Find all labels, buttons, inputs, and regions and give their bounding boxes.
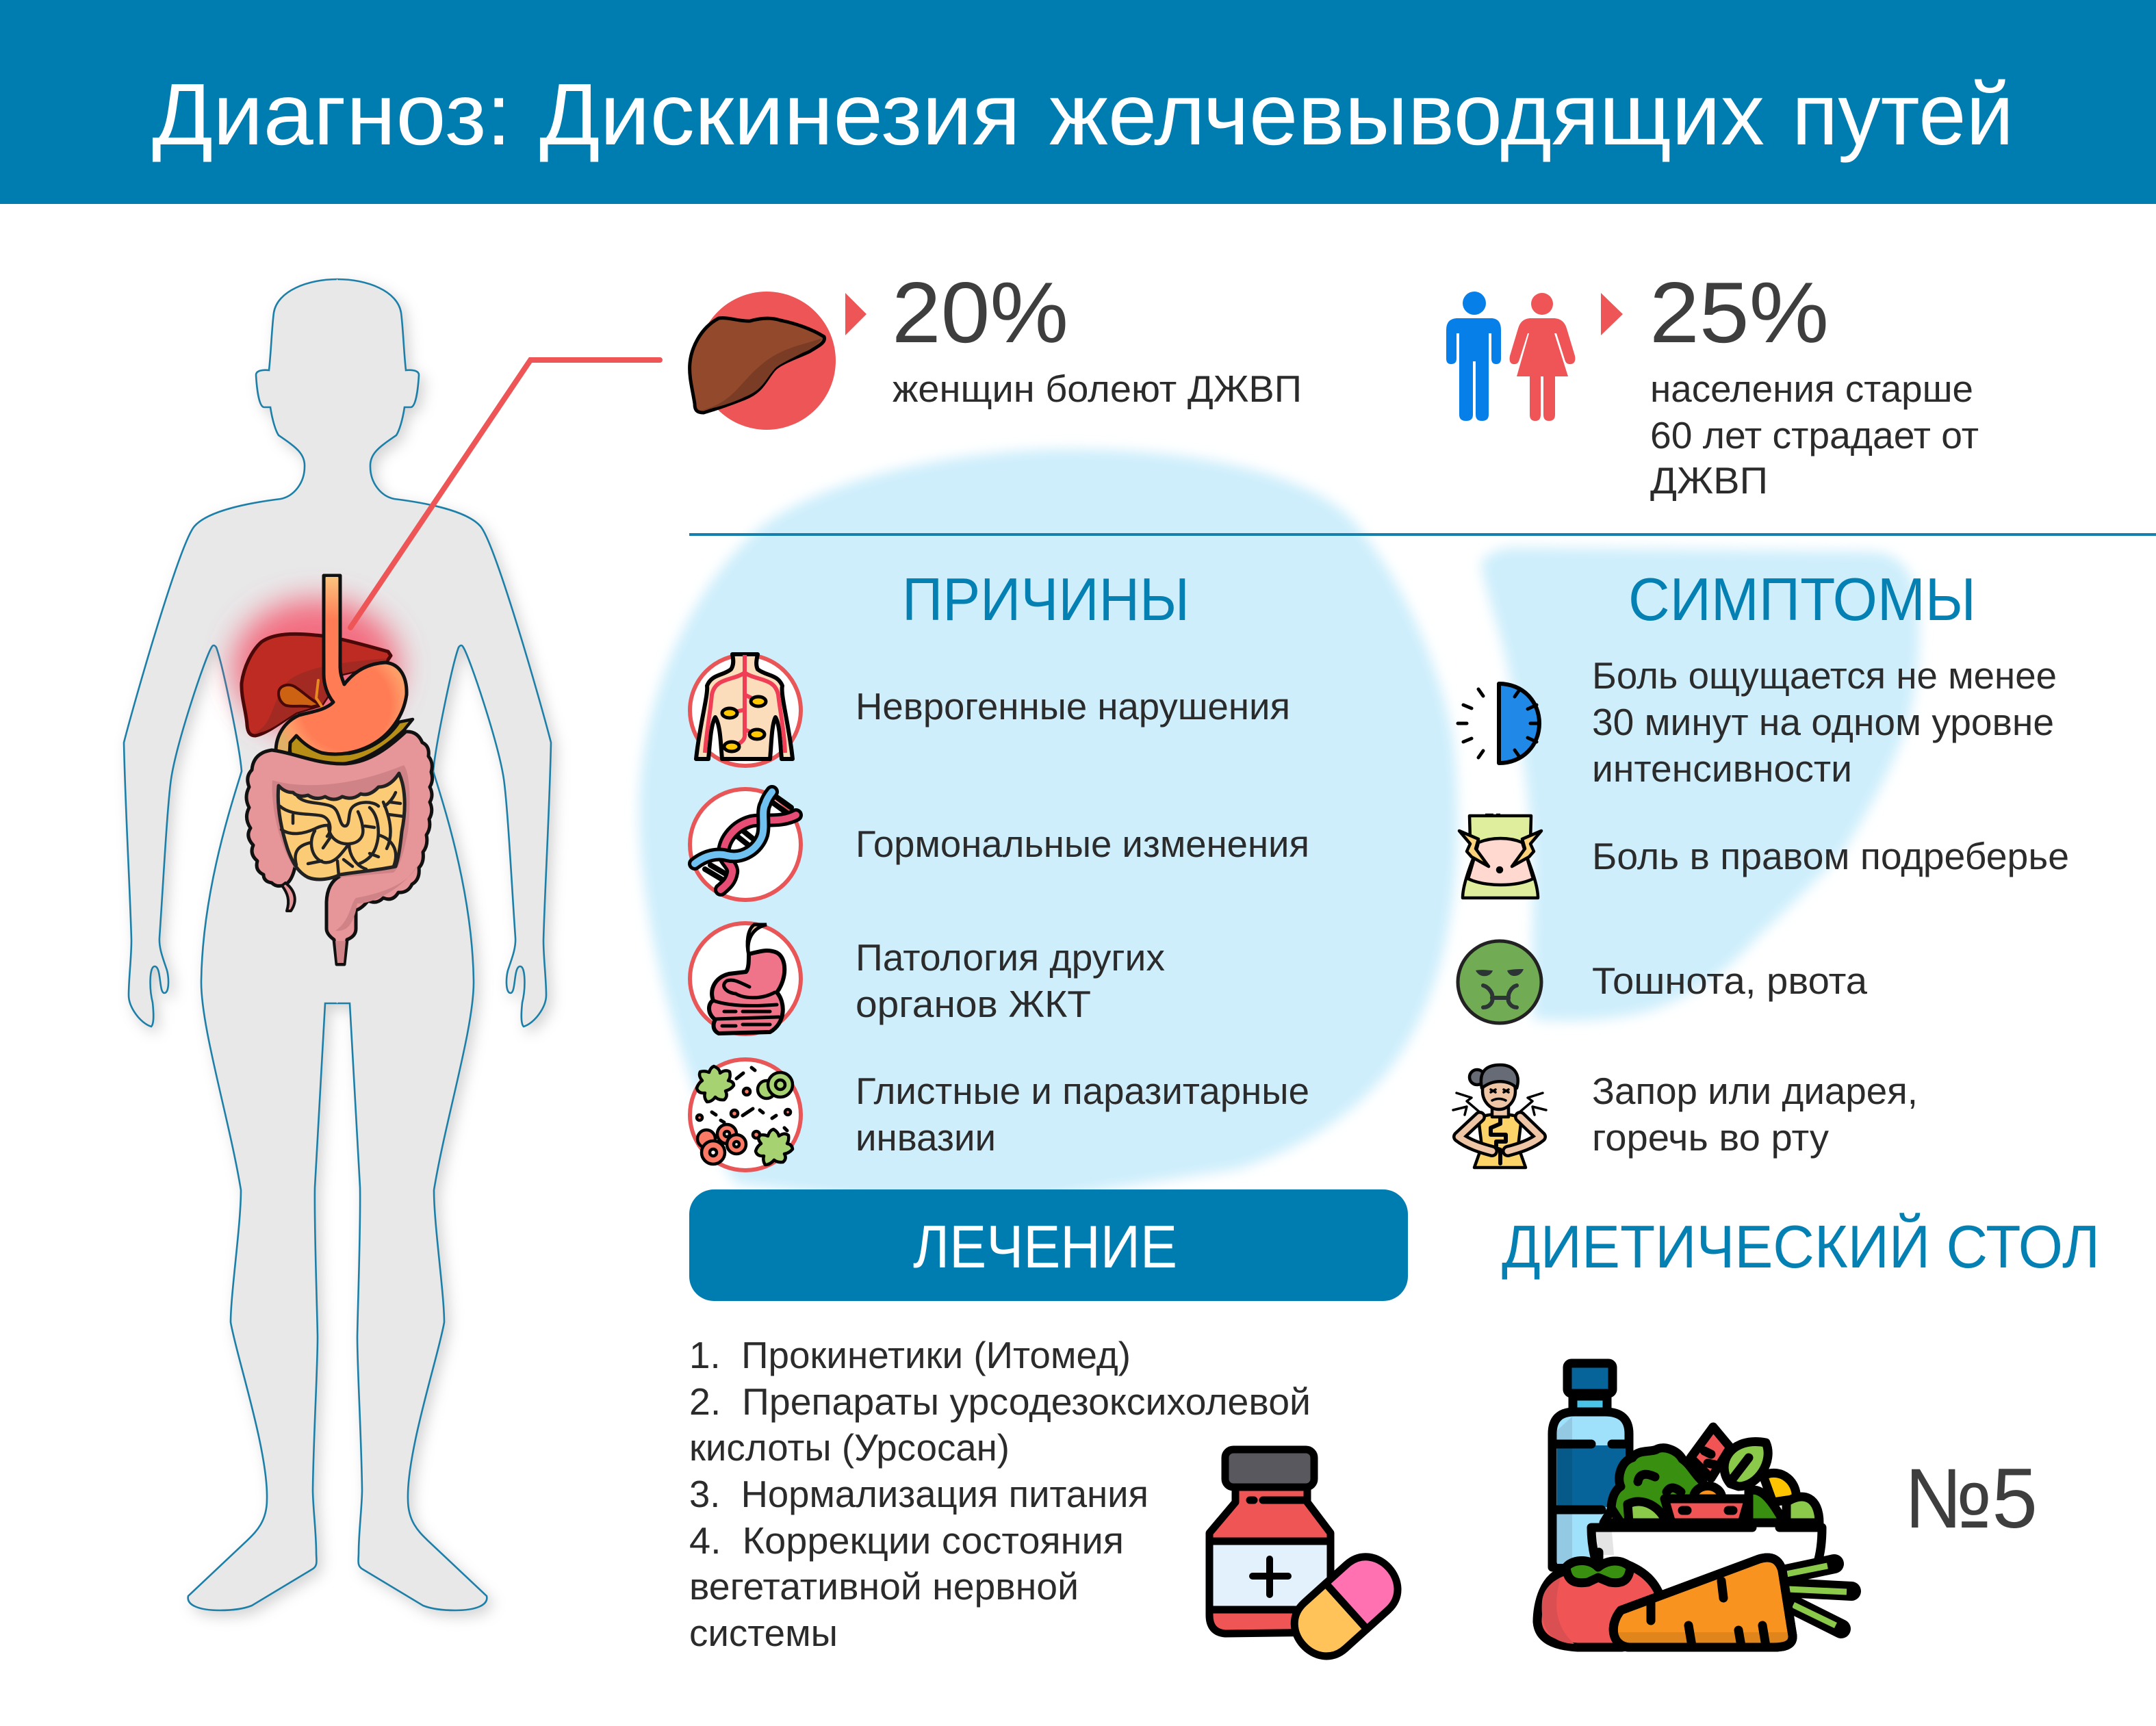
icon: food [1537,1363,1851,1647]
icon: nerves torso [690,654,801,766]
description: женщин болеют ДЖВП [893,368,1302,410]
pointer arrow [845,293,867,335]
text: constipation: Запор или диарея, [1592,1070,1918,1112]
treatment list: системы [689,1612,838,1654]
liver organ [242,634,391,736]
value: 20% [892,264,1068,361]
pointer arrow [1601,293,1623,335]
salad [1604,1427,1819,1523]
pancreas [290,719,413,764]
treatment list: кислоты (Урсосан) [689,1426,1010,1469]
inner shading [272,765,409,877]
heading: symptoms: СИМПТОМЫ [1628,565,1976,633]
heading: diet table: ДИЕТИЧЕСКИЙ СТОЛ [1502,1213,2100,1280]
tomato [1537,1552,1662,1647]
icon: stomach and intestine [690,923,801,1034]
text: constipation: горечь во рту [1592,1116,1830,1159]
treatment list: 1. Прокинетики (Итомед) [689,1334,1131,1376]
text: parasitic invasions: инвазии [856,1116,996,1159]
liver glow [233,599,400,736]
stat: 20 percent [690,264,1302,430]
text: pain duration: интенсивности [1592,747,1852,790]
icon: DNA helix [690,789,801,900]
appendix [282,883,295,911]
text: other organ pathology: Патология других [856,936,1165,979]
text: pain duration [1592,654,2057,790]
icon: belly pain [1459,815,1541,898]
treatment list: 2. Препараты урсодезоксихолевой [689,1380,1311,1423]
text: pain duration: 30 минут на одном уровне [1592,701,2054,743]
human body silhouette [124,279,551,1610]
icon: woman with stomach ache [1453,1065,1546,1168]
text: other organ pathology: органов ЖКТ [856,983,1091,1025]
text: parasitic invasions [856,1070,1309,1159]
header banner [0,0,2156,204]
panel: treatment [689,1189,1409,1668]
text: pain duration: Боль ощущается не менее [1592,654,2057,697]
value: 25% [1650,264,1829,361]
treatment list: 3. Нормализация питания [689,1473,1148,1515]
carrot [1613,1558,1851,1647]
icon: parasites [690,1059,801,1170]
panel: causes [690,565,1309,1170]
text: parasitic invasions: Глистные и паразитарные [856,1070,1309,1112]
description [1650,368,1979,502]
description: 60 лет страдает от [1650,414,1979,456]
text: neurogenic disorders: Неврогенные нарушения [856,685,1290,727]
small intestine [278,773,405,879]
text: constipation [1592,1070,1918,1159]
treatment list: вегетативной нервной [689,1565,1079,1608]
title [152,66,2014,164]
text: hormonal changes: Гормональные изменения [856,823,1309,865]
treatment list [689,1334,1311,1654]
heading: treatment [689,1189,1408,1301]
salad bowl [1591,1528,1822,1595]
title: Диагноз: [152,66,511,164]
icon: sick face [1458,941,1541,1023]
icon: liver on red circle [690,292,836,430]
water bottle [1552,1363,1629,1567]
panel: symptoms [1453,565,2069,1168]
description: ДЖВП [1650,459,1768,502]
title: путей [1792,66,2014,164]
text: right side pain: Боль в правом подреберье [1592,835,2069,877]
description: населения старше [1650,368,1973,410]
title: Дискинезия [539,66,1021,164]
heading: causes: ПРИЧИНЫ [902,565,1190,633]
diet number: №5 [1904,1452,2038,1546]
treatment list: 4. Коррекции состояния [689,1519,1124,1562]
stat: 25 percent [1446,264,1979,502]
icon: half clock [1458,684,1539,763]
digestive organs [242,576,433,964]
icon: man and woman [1446,292,1575,421]
panel: diet [1502,1213,2100,1647]
heading: treatment: ЛЕЧЕНИЕ [913,1213,1177,1280]
stomach and esophagus [276,576,407,754]
connector line from organ to stats [350,360,660,628]
title: желчевыводящих [1049,66,1764,164]
large intestine [246,732,433,964]
text: nausea: Тошнота, рвота [1592,959,1867,1002]
icon: medicine bottle and pill [1209,1450,1409,1668]
text: other organ pathology [856,936,1165,1025]
background blobs [639,449,1919,1211]
